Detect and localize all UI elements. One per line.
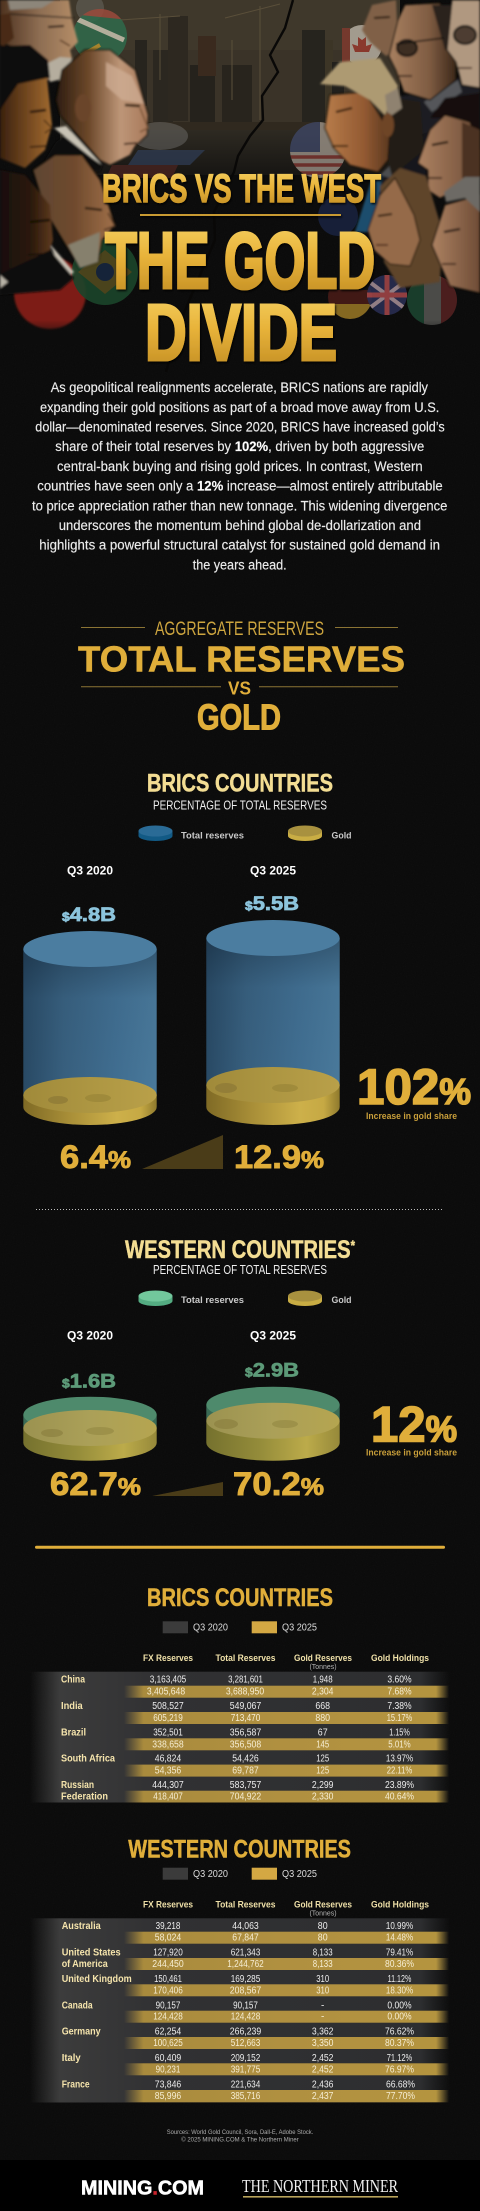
row: Russian Federation: Federation [61, 1792, 108, 1803]
row: Canada: 0.00% [387, 2012, 412, 2023]
row: Russian Federation [61, 1780, 449, 1803]
sources note [167, 2129, 313, 2143]
logo: MINING.COM: MINING.COM [81, 2177, 204, 2199]
Western subheading: PERCENTAGE OF TOTAL RESERVES [153, 1262, 327, 1277]
intro paragraph: highlights a powerful structural catalyst for sustained gold demand in [39, 538, 440, 553]
row: Germany [62, 2027, 449, 2049]
table header: (Tonnes) [310, 1911, 336, 1918]
leader: glasses, top right [447, 0, 480, 88]
dotted divider [36, 1208, 444, 1210]
table legend: Q3 2020 [193, 1623, 228, 1634]
row: China: 3,163,405 [150, 1675, 187, 1686]
row: Australia: 80 [318, 1933, 328, 1944]
row: Australia: 14.48% [386, 1933, 413, 1944]
row: Canada: 90,157 [156, 2000, 181, 2011]
row: United States of America: United States [62, 1948, 121, 1959]
legend: gold [288, 1290, 352, 1306]
panel: BRICS cylinders [23, 770, 471, 1175]
column: Q3 2025: Q3 2025 [250, 863, 296, 877]
BRICS heading: BRICS COUNTRIES [147, 770, 333, 798]
row: Brazil: 356,508 [230, 1739, 262, 1750]
row: South Africa: 69,787 [232, 1766, 259, 1777]
column: Q3 2025: $2.9B [245, 1361, 299, 1382]
legend: total reserves [138, 826, 244, 841]
table legend: Q3 2025 [282, 1869, 317, 1880]
hero illustration: leaders facing off over a cracked skyline [0, 0, 480, 330]
footer band [0, 2160, 480, 2211]
row: India: 713,470 [231, 1713, 261, 1724]
callout: 102% increase: Increase in gold share [366, 1111, 457, 1121]
column: Q3 2025 [206, 1328, 340, 1502]
row: South Africa: 13.97% [386, 1754, 413, 1765]
row: South Africa: South Africa [61, 1754, 115, 1765]
title block [102, 167, 381, 377]
row: India: 508,527 [152, 1701, 184, 1712]
table legend: Q3 2020 [193, 1869, 228, 1880]
logo: The Northern Miner: THE NORTHERN MINER [242, 2176, 398, 2196]
row: China: 7.68% [387, 1687, 412, 1698]
row: Italy: Italy [62, 2053, 81, 2064]
value: 12.9%: 12.9% [234, 1139, 324, 1175]
BRICS subheading: PERCENTAGE OF TOTAL RESERVES [153, 797, 327, 812]
table header: Gold Holdings [371, 1653, 429, 1664]
row: United Kingdom: 310 [316, 1974, 329, 1985]
table header: Gold Holdings [371, 1899, 429, 1910]
row: China: 3.60% [387, 1675, 412, 1686]
row: United States of America: 127,920 [153, 1948, 183, 1959]
row: India: 605,219 [153, 1713, 183, 1724]
row: India: 15.17% [387, 1713, 412, 1724]
row: Canada: - [321, 2012, 324, 2023]
row: Germany: 3,350 [312, 2038, 334, 2049]
row: Italy: 90,231 [156, 2064, 181, 2075]
row: United States of America: 244,450 [152, 1959, 184, 1970]
leader: blond hair, centre-right [320, 58, 430, 240]
row: United Kingdom: 11.12% [388, 1974, 411, 1985]
row: China: China [61, 1675, 85, 1686]
table header [143, 1653, 429, 1671]
leader: long hair, lower right [368, 168, 442, 288]
grey table background [30, 1672, 450, 1802]
legend: gold: Gold [332, 1295, 352, 1305]
leader: top-left [0, 0, 78, 82]
legend: total reserves: Total reserves [181, 831, 244, 841]
row: Canada: 90,157 [233, 2000, 258, 2011]
row: United States of America: 79.41% [386, 1948, 413, 1959]
row: Canada: Canada [62, 2000, 93, 2011]
flag: Brazil [70, 238, 140, 306]
table header: Gold Reserves [294, 1653, 352, 1664]
cylinder: total reserves 2025 [206, 920, 340, 1103]
table header: FX Reserves [143, 1653, 193, 1664]
section heading: total reserves vs gold [78, 619, 405, 737]
leader: lower left [0, 170, 74, 295]
column: Q3 2025: $5.5B [245, 894, 299, 915]
intro paragraph: the years ahead. [193, 557, 287, 572]
sources note: Sources: World Gold Council, Sora, Dall-E, Adobe Stock. [167, 2129, 313, 2136]
cylinder: gold 2020 [23, 1410, 157, 1461]
row: India: 668 [315, 1701, 330, 1712]
row: Brazil: 145 [316, 1739, 329, 1750]
intro paragraph: dollar—denominated reserves. Since 2020, BRICS have increased gold’s [35, 420, 445, 434]
intro paragraph: underscores the momentum behind global de-dollarization and [59, 518, 421, 533]
row: Italy: 71.12% [387, 2053, 412, 2064]
row: United Kingdom: United Kingdom [62, 1974, 132, 1985]
row: Canada: 0.00% [387, 2000, 412, 2011]
main title line 2: DIVIDE [145, 288, 337, 377]
table header [143, 1899, 429, 1918]
table header: Total Reserves [216, 1653, 276, 1664]
value: 6.4%: 6.4% [60, 1139, 131, 1175]
cylinder: total reserves 2020 [23, 931, 157, 1113]
flag: United Kingdom [367, 275, 407, 315]
row: South Africa: 54,426 [232, 1754, 259, 1765]
row: China: 3,405,648 [147, 1687, 186, 1698]
row: United States of America: 8,133 [313, 1959, 333, 1970]
row: Brazil: 356,587 [230, 1727, 262, 1738]
intro paragraph: to price appreciation rather than new tonnage. This widening divergence [32, 498, 447, 513]
column: Q3 2025: Q3 2025 [250, 1328, 296, 1342]
flag: Australia [318, 196, 358, 236]
flag: South Africa [74, 9, 127, 56]
crack through the skyline [166, 0, 293, 372]
row: South Africa: 46,824 [155, 1754, 182, 1765]
gold rule [140, 214, 341, 216]
row: China [61, 1675, 449, 1698]
faded base under the leaders [0, 320, 480, 344]
Western leaders [320, 0, 480, 293]
intro paragraph: expanding their gold positions as part of a broad move away from U.S. [40, 400, 439, 415]
row: Australia: 58,024 [155, 1933, 182, 1944]
row: Germany: 512,663 [231, 2038, 261, 2049]
row: Brazil: Brazil [61, 1727, 86, 1738]
sources note: © 2025 MINING.COM & The Northern Miner [181, 2135, 300, 2143]
row: Brazil: 352,501 [153, 1727, 183, 1738]
panel: Western table [30, 1835, 450, 2102]
row: United States of America: of America [62, 1959, 108, 1970]
value: 70.2%: 70.2% [233, 1466, 324, 1502]
row: France: 385,716 [231, 2091, 261, 2102]
row: United Kingdom [62, 1974, 449, 1996]
cylinder: total reserves 2020 [23, 1397, 157, 1433]
row: Russian Federation: 583,757 [230, 1780, 262, 1791]
callout: 12% increase: 12% [371, 1397, 457, 1453]
Western heading: WESTERN COUNTRIES [125, 1236, 404, 1264]
row: United Kingdom: 169,285 [231, 1974, 261, 1985]
table heading: WESTERN COUNTRIES [128, 1835, 351, 1863]
cylinder: total reserves 2025 [206, 1387, 340, 1423]
row: India: India [61, 1701, 83, 1712]
heading: gold: GOLD [197, 696, 281, 737]
row: Italy: 391,775 [231, 2064, 261, 2075]
row: Brazil: 1.15% [389, 1727, 410, 1738]
table header: (Tonnes) [310, 1664, 336, 1671]
panel: Western cylinders [23, 1236, 457, 1502]
row: South Africa: 22.11% [387, 1766, 412, 1777]
row: United States of America: 80.36% [385, 1959, 414, 1970]
row: China: 1,948 [313, 1675, 333, 1686]
flag: Canada [342, 25, 382, 65]
row: Germany: 76.62% [385, 2027, 414, 2038]
intro paragraph: As geopolitical realignments accelerate, BRICS nations are rapidly [51, 380, 428, 395]
heading: vs: VS [228, 678, 251, 698]
row: Italy: 2,452 [312, 2064, 334, 2075]
row: France: 85,996 [155, 2091, 182, 2102]
row: Australia: 80 [318, 1921, 328, 1932]
row: Australia: 39,218 [156, 1921, 181, 1932]
column: Q3 2020: $1.6B [62, 1372, 116, 1393]
row: Italy: 2,452 [312, 2053, 334, 2064]
row: United Kingdom: 150,461 [154, 1974, 182, 1985]
row: Australia: 10.99% [386, 1921, 413, 1932]
leader: grey hair, lower right [432, 177, 480, 293]
flag: United States [290, 122, 346, 178]
row: France: France [62, 2079, 90, 2090]
row: Germany: 62,254 [155, 2027, 182, 2038]
flag: India [76, 0, 104, 22]
row: Russian Federation: 444,307 [152, 1780, 184, 1791]
row: France: 2,437 [312, 2091, 334, 2102]
row: Canada: 124,428 [231, 2012, 261, 2023]
leader: centre, facing right [45, 50, 148, 172]
leader: right side, dark hair [418, 93, 480, 198]
row: France: 2,436 [312, 2079, 334, 2090]
row: Brazil: 67 [318, 1727, 328, 1738]
table legend: Q3 2025 [282, 1623, 317, 1634]
cylinder: gold 2025 [206, 1067, 340, 1125]
row: Australia: Australia [62, 1921, 101, 1932]
row: Canada: 124,428 [153, 2012, 183, 2023]
leader: lower centre, grey beard [33, 155, 115, 280]
intro paragraph [32, 380, 447, 572]
row: Germany: 266,239 [230, 2027, 262, 2038]
column: Q3 2020: $4.8B [62, 905, 116, 926]
row: Australia: 44,063 [232, 1921, 259, 1932]
row: Brazil: 5.01% [388, 1739, 411, 1750]
leader: glasses, top centre [372, 3, 480, 135]
row: Russian Federation: 40.64% [385, 1792, 414, 1803]
row: United Kingdom: 170,406 [153, 1985, 183, 1996]
row: India: 880 [315, 1713, 330, 1724]
grey table background [30, 1918, 450, 2102]
row: Italy: 60,409 [155, 2053, 182, 2064]
legend: gold [288, 826, 352, 841]
leader: centre-left, dark hair [0, 45, 52, 168]
column: Q3 2020: Q3 2020 [67, 1328, 113, 1342]
heading: total reserves: TOTAL RESERVES [78, 639, 405, 680]
row: Canada [62, 2000, 449, 2023]
column: Q3 2020: Q3 2020 [67, 863, 113, 877]
arrow wedge: Western growth [152, 1482, 223, 1496]
row: Italy: 209,152 [231, 2053, 261, 2064]
row: United Kingdom: 310 [316, 1985, 329, 1996]
table header: FX Reserves [143, 1899, 193, 1910]
cylinder: gold 2020 [23, 1077, 157, 1125]
row: Russian Federation: 23.89% [385, 1780, 414, 1791]
table heading: BRICS COUNTRIES [147, 1584, 333, 1612]
row: China: 2,304 [312, 1687, 334, 1698]
flag: Italy [407, 275, 458, 325]
leader: top, partly hidden [362, 0, 398, 56]
flag: China [14, 257, 86, 329]
row: China: 3,281,601 [228, 1675, 263, 1686]
legend: total reserves [138, 1290, 244, 1306]
row: Germany: 100,625 [153, 2038, 183, 2049]
row: France: 73,846 [155, 2079, 182, 2090]
arrow wedge: BRICS growth [142, 1135, 223, 1169]
row: China: 3,688,950 [226, 1687, 265, 1698]
intro paragraph: central-bank buying and rising gold prices. In contrast, Western [57, 459, 423, 474]
row: India: 7.38% [387, 1701, 412, 1712]
table legend [163, 1621, 317, 1634]
row: United Kingdom: 18.30% [386, 1985, 413, 1996]
row: Canada: - [321, 2000, 324, 2011]
callout: 102% increase: 102% [357, 1059, 471, 1115]
row: United States of America: 621,343 [231, 1948, 261, 1959]
value: 62.7%: 62.7% [50, 1466, 141, 1502]
legend: gold: Gold [332, 831, 352, 841]
gold divider [35, 1546, 445, 1549]
skyline background [60, 0, 400, 195]
heading: aggregate reserves: AGGREGATE RESERVES [155, 619, 324, 640]
Western heading: * [351, 1237, 355, 1253]
row: Australia: 67,847 [232, 1933, 259, 1944]
row: Russian Federation: 2,330 [312, 1792, 334, 1803]
table header: Gold Reserves [294, 1899, 352, 1910]
intro paragraph: countries have seen only a 12% increase—almost entirely attributable [37, 479, 443, 494]
column: Q3 2025 [206, 863, 340, 1175]
flag: Russia [106, 122, 205, 178]
row: Brazil [61, 1727, 449, 1750]
row: South Africa: 125 [316, 1754, 329, 1765]
row: United States of America [62, 1948, 449, 1970]
BRICS leaders [0, 0, 148, 295]
row: India: 549,067 [230, 1701, 262, 1712]
legend: total reserves: Total reserves [181, 1295, 244, 1305]
row: France [62, 2079, 449, 2102]
row: France: 77.70% [386, 2091, 415, 2102]
flag: Germany [328, 290, 370, 319]
column: Q3 2020 [23, 863, 157, 1175]
row: Russian Federation: 704,922 [230, 1792, 262, 1803]
row: Germany: Germany [62, 2027, 101, 2038]
row: Russian Federation: Russian [61, 1780, 94, 1791]
row: Germany: 80.37% [385, 2038, 414, 2049]
row: India [61, 1701, 449, 1724]
row: South Africa [61, 1754, 449, 1777]
table header: Total Reserves [216, 1899, 276, 1910]
column: Q3 2020 [23, 1328, 157, 1502]
intro paragraph: share of their total reserves by 102%, driven by both aggressive [55, 439, 424, 454]
row: United States of America: 1,244,762 [227, 1959, 264, 1970]
row: Italy [62, 2053, 449, 2075]
table legend [163, 1868, 317, 1880]
row: Russian Federation: 2,299 [312, 1780, 334, 1791]
row: South Africa: 54,356 [155, 1766, 182, 1777]
row: United Kingdom: 208,567 [230, 1985, 262, 1996]
callout: 12% increase: Increase in gold share [366, 1448, 457, 1458]
row: Brazil: 338,658 [152, 1739, 184, 1750]
row: France: 221,634 [231, 2079, 261, 2090]
row: Australia [62, 1921, 449, 1944]
row: Italy: 76.97% [385, 2064, 414, 2075]
row: South Africa: 125 [316, 1766, 329, 1777]
cylinder: gold 2025 [206, 1403, 340, 1461]
panel: BRICS table [30, 1584, 450, 1803]
row: Russian Federation: 418,407 [153, 1792, 183, 1803]
row: France: 66.68% [386, 2079, 415, 2090]
row: United States of America: 8,133 [313, 1948, 333, 1959]
row: Germany: 3,362 [312, 2027, 334, 2038]
